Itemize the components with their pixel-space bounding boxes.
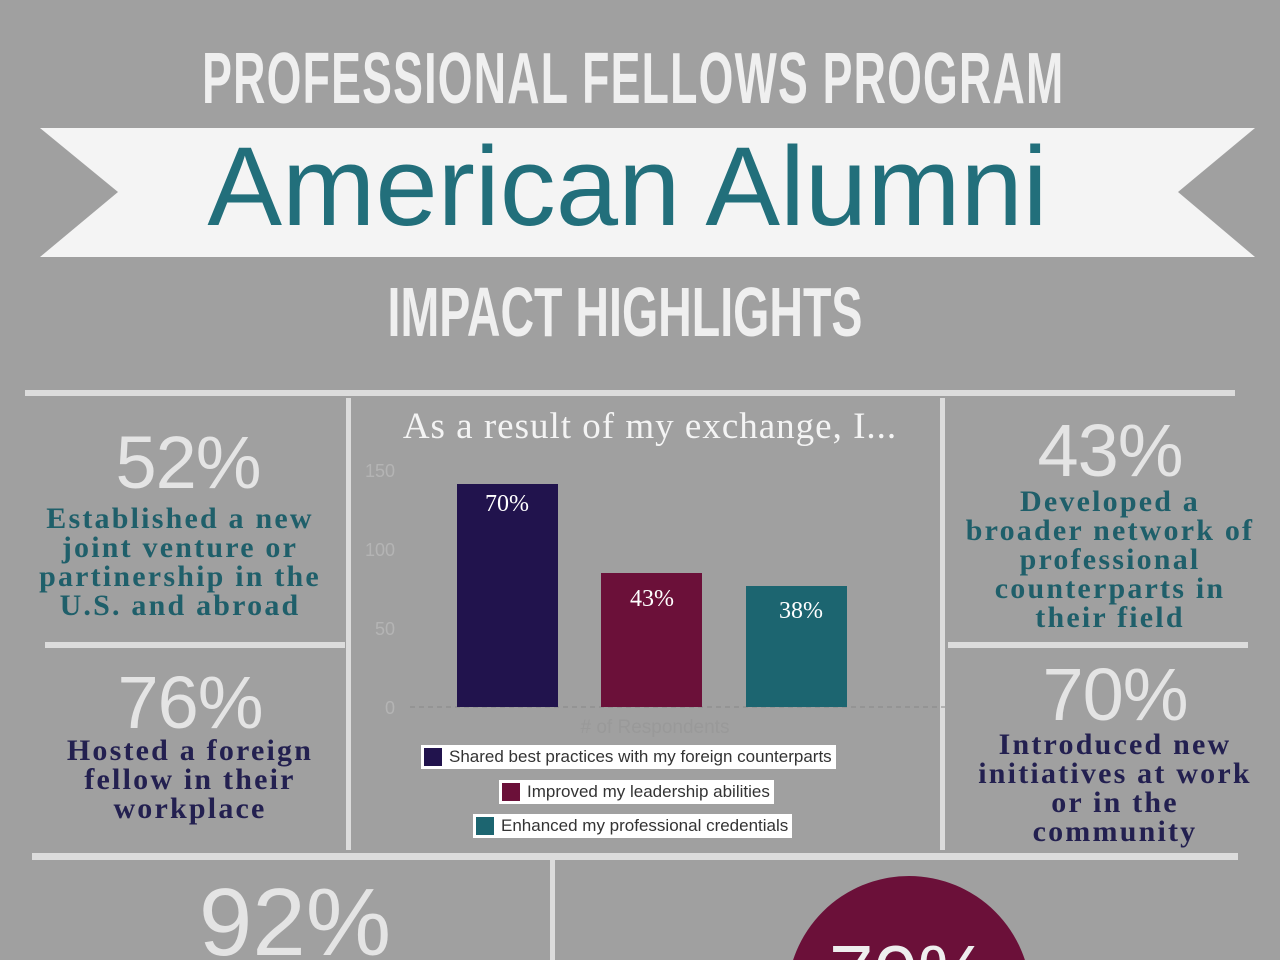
legend: Improved my leadership abilities [527, 782, 770, 801]
stat: 43%: counterparts in [995, 572, 1225, 605]
legend: Shared best practices with my foreign counterparts [449, 747, 832, 766]
legend: Enhanced my professional credentials [501, 816, 788, 835]
stat: 70%: community [1033, 815, 1197, 848]
heading: American Alumni: American Alumni [207, 124, 1048, 249]
stat: 76%: fellow in their [84, 763, 296, 796]
bar chart: 100 [365, 540, 395, 560]
bar chart: 0 [385, 698, 395, 718]
ribbon banner [40, 128, 1255, 257]
bar chart: 150 [365, 461, 395, 481]
stat: 70%: 70% [1042, 653, 1188, 736]
legend [421, 745, 836, 838]
chart title: As a result of my exchange, I... [403, 406, 897, 447]
stat: 70%: initiatives at work [978, 757, 1252, 790]
bar chart: # of Respondents [581, 717, 729, 738]
bar chart: 38% [779, 598, 823, 624]
stat: 43%: broader network of [966, 514, 1254, 547]
stat: 52%: Established a new [46, 502, 314, 535]
stat: 52%: joint venture or [62, 531, 298, 564]
title: professional fellows program: PROFESSIONAL FELLOWS PROGRAM [202, 39, 1064, 119]
stat: 43%: 43% [1037, 409, 1183, 492]
stat: 52%: U.S. and abroad [60, 589, 300, 622]
chart: as a result of my exchange [365, 406, 945, 838]
bar chart [365, 461, 945, 738]
stat: 52%: partinership in the [39, 560, 321, 593]
stat: 76%: 76% [117, 661, 263, 744]
stat: 70% [978, 653, 1252, 848]
circle: 70% [793, 876, 1025, 960]
stat: 43%: their field [1035, 601, 1185, 634]
stat: 76% [67, 661, 313, 825]
bar chart: 43% [630, 586, 674, 612]
stat: 76%: Hosted a foreign [67, 734, 313, 767]
stat: 43% [966, 409, 1254, 634]
stat: 70%: Introduced new [999, 728, 1231, 761]
bar chart: 70% [485, 491, 529, 517]
stat: 52%: 52% [115, 421, 261, 504]
stat: 52% [39, 421, 321, 622]
stat: 76%: workplace [113, 792, 267, 825]
bar chart: 50 [375, 619, 395, 639]
stat: 43%: professional [1020, 543, 1200, 576]
stat: 43%: Developed a [1020, 485, 1200, 518]
stat: 70%: or in the [1051, 786, 1179, 819]
subtitle: impact highlights: IMPACT HIGHLIGHTS [388, 273, 862, 351]
